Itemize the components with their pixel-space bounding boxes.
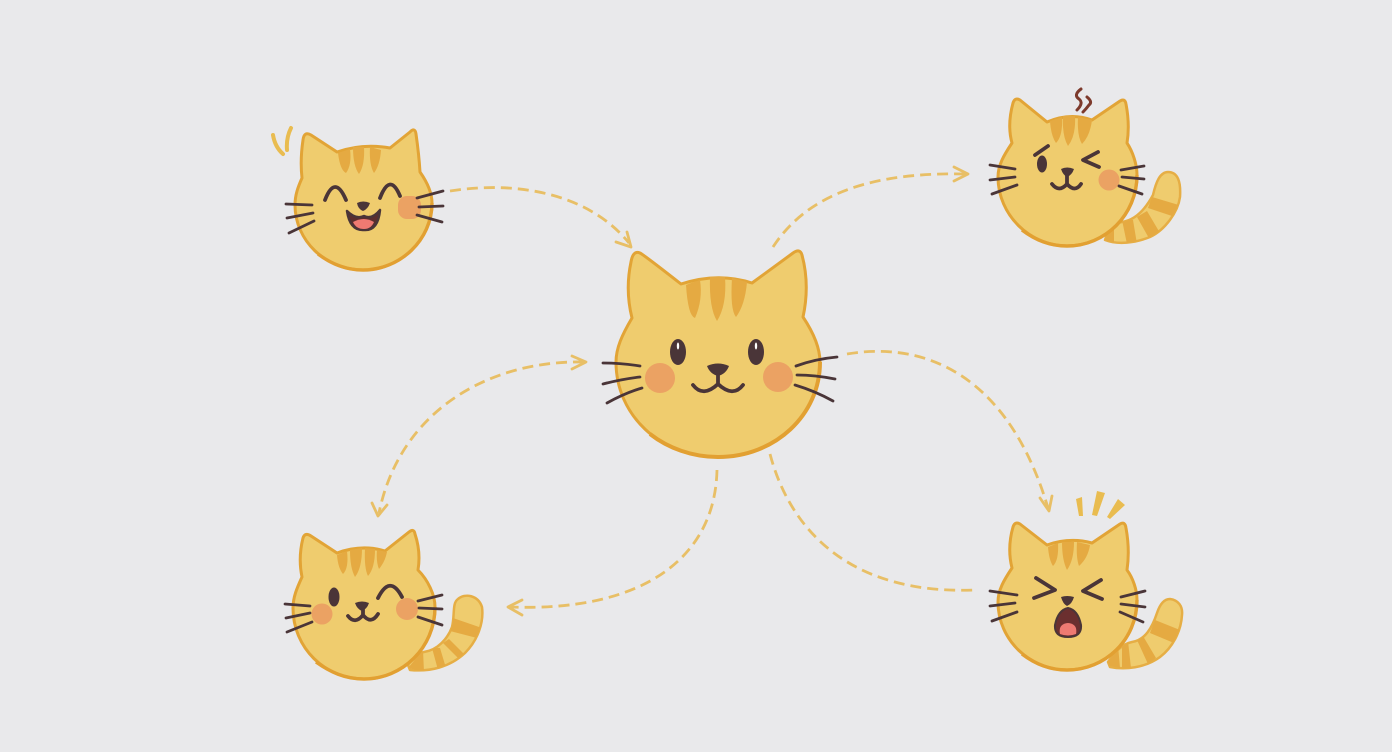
shock lines above shouting cat	[1076, 491, 1125, 519]
playful winking cat, bottom left	[285, 530, 482, 679]
arrow: centre cat to playful cat	[508, 470, 717, 615]
happy cat, top left	[273, 128, 443, 270]
curved dashed connector: centre cat toward shouting cat	[770, 454, 975, 590]
shouting cat, bottom right	[990, 491, 1182, 670]
arrow: happy cat to centre cat	[450, 188, 631, 247]
double-headed arrow: centre cat and playful cat	[372, 356, 586, 516]
centre cat	[603, 251, 837, 457]
arrow: centre cat to shouting cat	[847, 351, 1052, 511]
annoyed winking cat, top right	[990, 89, 1182, 246]
arrow: centre cat to winking annoyed cat	[773, 167, 968, 247]
